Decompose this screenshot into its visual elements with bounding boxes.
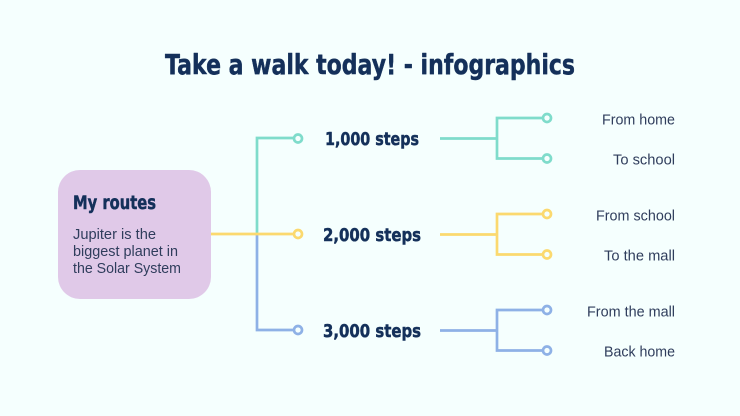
label: To school: To school [613, 152, 675, 168]
step label: 1,000 steps: 1,000 steps [325, 129, 419, 150]
branch: yellow [440, 210, 551, 258]
branch: teal [440, 114, 551, 162]
label: From the mall: From the mall [587, 304, 675, 320]
label: Back home: Back home [604, 344, 675, 360]
panel: my routes [58, 170, 211, 299]
step label: 2,000 steps: 2,000 steps [323, 225, 421, 246]
connector: yellow from panel to second step [211, 230, 302, 238]
step label: 3,000 steps: 3,000 steps [323, 321, 421, 342]
panel text: biggest planet in [73, 243, 178, 260]
panel heading: My routes [73, 193, 156, 214]
label: From home: From home [602, 112, 675, 128]
connector: blue trunk to third step [257, 234, 302, 334]
connector: teal trunk to first step [257, 134, 302, 234]
panel text: the Solar System [73, 260, 181, 277]
label: From school: From school [596, 208, 675, 224]
title: Take a walk today! - infographics [165, 48, 575, 81]
panel text: Jupiter is the [73, 226, 156, 243]
panel text [73, 226, 181, 277]
branch: blue [440, 306, 551, 354]
label: To the mall: To the mall [604, 248, 675, 264]
